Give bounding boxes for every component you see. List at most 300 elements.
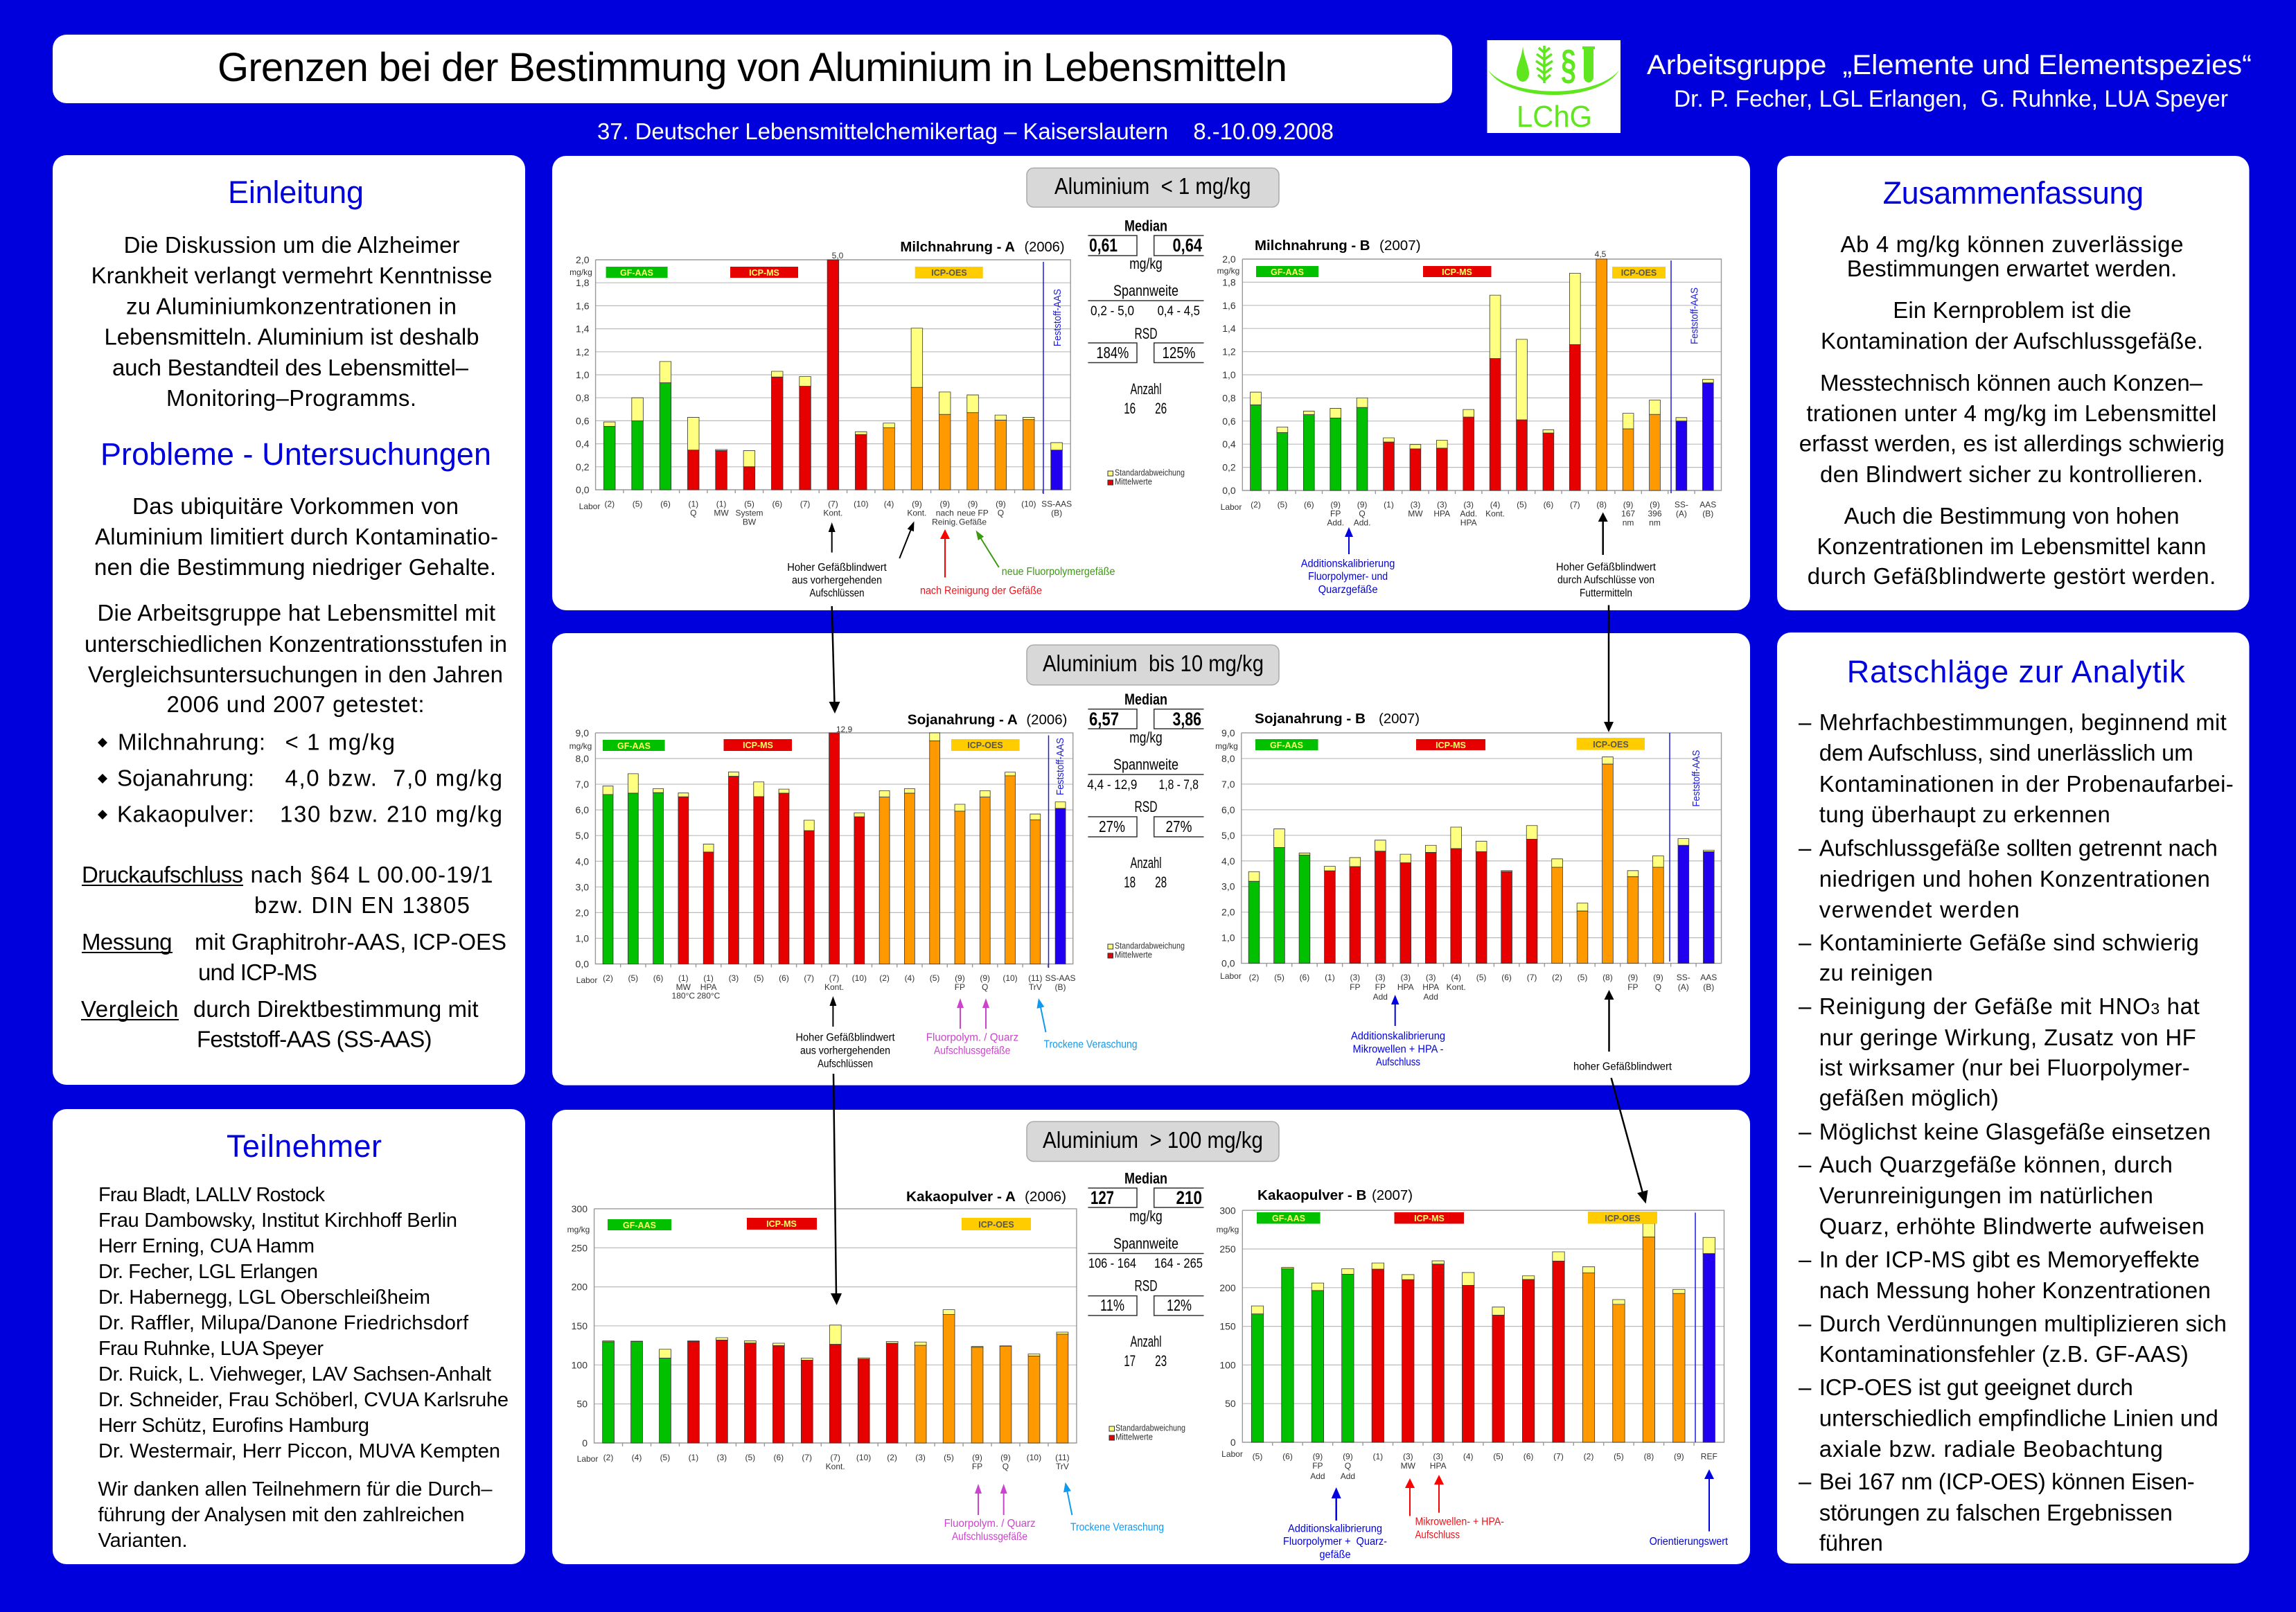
x axis labels: FP bbox=[955, 982, 965, 992]
list: participants: Dr. Ruick, L. Viehweger, LAV Sachsen-Anhalt bbox=[98, 1363, 491, 1385]
statistics: Kakaopulver: 164 - 265 bbox=[1154, 1257, 1203, 1271]
list: advice: zu reinigen bbox=[1819, 960, 1933, 985]
statistics: Kakaopulver: 11% bbox=[1100, 1296, 1124, 1314]
method tags: ICP-MS bbox=[743, 741, 773, 750]
y axis labels: 6,0 bbox=[576, 804, 589, 815]
text block: comparison studies: unterschiedlichen Konzentrationsstufen in bbox=[85, 631, 507, 657]
arrow: Sojanahrung to Kakaopulver A bbox=[831, 1074, 842, 1305]
x axis labels: (7) bbox=[1527, 973, 1537, 982]
x axis labels: (5) bbox=[660, 1453, 670, 1462]
x axis labels: (7) bbox=[804, 973, 814, 983]
callout: Additionskalibrierung bbox=[1301, 558, 1395, 596]
chart title: Milchnahrung - B bbox=[1255, 238, 1370, 254]
y axis labels: 150 bbox=[1219, 1321, 1236, 1332]
method tags bbox=[1256, 266, 1666, 278]
chart title: Kakaopulver - A bbox=[906, 1189, 1016, 1205]
x axis labels: (2) bbox=[879, 973, 890, 983]
y axis labels bbox=[1217, 1205, 1239, 1448]
chart title: (2007) bbox=[1379, 238, 1421, 254]
logo: LChG: LChG bbox=[1517, 100, 1592, 134]
callout: Additionskalibrierung Mikrowellen: Mikrowellen + HPA - bbox=[1352, 1043, 1444, 1055]
y axis labels bbox=[567, 1203, 590, 1449]
value label: 4,5 bbox=[1595, 249, 1607, 259]
x axis labels: (5) bbox=[1278, 500, 1287, 510]
y axis labels: 7,0 bbox=[1221, 779, 1235, 790]
list: advice: axiale bzw. radiale Beobachtung bbox=[1819, 1436, 2163, 1462]
x axis labels: (1) bbox=[1384, 500, 1394, 510]
x axis labels: HPA bbox=[1397, 982, 1414, 992]
method tags bbox=[1255, 738, 1645, 750]
statistics: Kakaopulver: 17 bbox=[1124, 1352, 1136, 1370]
x axis labels: (1) bbox=[678, 973, 689, 983]
x axis labels: nach bbox=[936, 508, 954, 518]
solid sampling divider: Feststoff-AAS bbox=[1690, 750, 1702, 807]
statistics: Sojanahrung: RSD bbox=[1135, 798, 1157, 815]
x axis labels: (9) bbox=[1313, 1452, 1323, 1462]
method tags bbox=[606, 267, 983, 278]
method tags: GF-AAS bbox=[623, 1221, 656, 1230]
x axis labels: (5) bbox=[754, 973, 764, 983]
chart: Sojanahrung A bbox=[569, 712, 1138, 1070]
x axis labels: (6) bbox=[1304, 500, 1314, 510]
list: advice: niedrigen und hohen Konzentrationen bbox=[1819, 866, 2210, 892]
list: advice: Verunreinigungen im natürlichen bbox=[1819, 1183, 2153, 1208]
x axis labels: Gefäße bbox=[959, 517, 987, 527]
callout: Additionskalibrierung Fluorpolymer: gefäße bbox=[1319, 1549, 1351, 1561]
y axis labels: 1,8 bbox=[576, 277, 590, 288]
x axis labels: (6) bbox=[1282, 1452, 1293, 1462]
text block: summary: Auch die Bestimmung von hohen bbox=[1844, 503, 2180, 529]
x axis labels: System bbox=[735, 508, 763, 518]
arrow: magenta Q bbox=[1000, 1484, 1007, 1515]
arrow: blue reference bbox=[1704, 1469, 1714, 1532]
arrow: cyan bbox=[1036, 998, 1046, 1032]
x axis labels: (6) bbox=[779, 973, 789, 983]
text block: methods: Messung bbox=[82, 929, 172, 955]
list: advice: Kontaminationsfehler (z.B. GF-AAS) bbox=[1819, 1341, 2189, 1367]
plot bars bbox=[595, 733, 1073, 968]
x axis labels: (6) bbox=[773, 1453, 784, 1462]
x axis labels: (9) bbox=[1674, 1452, 1684, 1462]
x axis labels: (3) bbox=[1350, 973, 1360, 982]
heading: Teilnehmer: Teilnehmer bbox=[227, 1128, 382, 1164]
x axis labels: (7) bbox=[830, 1453, 840, 1462]
x axis labels: 180°C bbox=[672, 991, 695, 1001]
method tags: ICP-OES bbox=[978, 1220, 1014, 1230]
panel heading pill: Aluminium bis 10 mg/kg bbox=[1043, 650, 1264, 676]
callout: high vessel blank: aus vorhergehenden bbox=[800, 1045, 890, 1057]
statistics: Milchnahrung: 0,61 bbox=[1089, 235, 1118, 256]
list: sample concentrations bbox=[98, 729, 502, 827]
legend: Standardabweichung bbox=[1115, 1423, 1185, 1433]
list: advice: nach Messung hoher Konzentrationen bbox=[1819, 1277, 2211, 1303]
x axis labels: (10) bbox=[852, 973, 867, 983]
x axis labels: Kont. bbox=[824, 982, 844, 992]
text block: ubiquitous occurrence: Aluminium limitiert durch Kontaminatio- bbox=[95, 524, 498, 549]
list: participants: Frau Bladt, LALLV Rostock bbox=[98, 1184, 326, 1206]
list: participants: Dr. Westermair, Herr Piccon, MUVA Kempten bbox=[98, 1440, 500, 1462]
chart title bbox=[1255, 238, 1421, 254]
y axis labels: 0,6 bbox=[576, 415, 590, 426]
x axis labels: (8) bbox=[1596, 500, 1607, 510]
x axis labels: 396 bbox=[1648, 509, 1662, 519]
x axis labels: (9) bbox=[1330, 500, 1341, 510]
text block: methods bbox=[81, 862, 506, 1052]
x axis labels: HPA bbox=[1422, 982, 1439, 992]
callout: Fluorpolym / Quarz: Fluorpolym. / Quarz bbox=[944, 1518, 1036, 1530]
method tags bbox=[608, 1218, 1031, 1230]
y axis labels: 200 bbox=[572, 1282, 588, 1293]
method tags: ICP-MS bbox=[1436, 741, 1466, 750]
x axis labels: SS-AAS bbox=[1045, 973, 1076, 983]
list: advice: Bei 167 nm (ICP-OES) können Eisen- bbox=[1819, 1469, 2195, 1494]
list: advice: störungen zu falschen Ergebnissen bbox=[1819, 1500, 2173, 1525]
x axis labels: MW bbox=[714, 508, 729, 518]
x axis labels: Add bbox=[1310, 1471, 1325, 1481]
text block: summary: Konzentrationen im Lebensmittel kann bbox=[1817, 533, 2206, 559]
x axis labels: (7) bbox=[800, 499, 810, 509]
y axis labels: 250 bbox=[572, 1242, 588, 1253]
method tags bbox=[1257, 1212, 1657, 1223]
x axis labels: (9) bbox=[1343, 1452, 1353, 1462]
x axis labels: (7) bbox=[829, 973, 839, 983]
x axis labels: SS- bbox=[1675, 500, 1688, 510]
method tags: ICP-MS bbox=[1442, 267, 1472, 277]
x axis labels: (B) bbox=[1054, 982, 1066, 992]
statistics: Sojanahrung bbox=[1087, 691, 1204, 960]
x axis labels: (9) bbox=[968, 499, 978, 509]
chart: Kakaopulver B bbox=[1217, 1188, 1728, 1561]
list: advice: ist wirksamer (nur bei Fluorpolymer- bbox=[1819, 1055, 2190, 1081]
working group header: Dr. P. Fecher, LGL Erlangen, G. Ruhnke, LUA Speyer bbox=[1674, 86, 2228, 112]
y axis labels: 100 bbox=[572, 1359, 588, 1370]
text block: introduction: Monitoring–Programms. bbox=[166, 385, 416, 411]
statistics: Milchnahrung: 0,64 bbox=[1172, 235, 1202, 256]
arrow: magenta FP bbox=[975, 1484, 982, 1515]
y axis labels: 3,0 bbox=[576, 881, 589, 892]
arrow: magenta FP bbox=[957, 998, 964, 1029]
x axis labels: (10) bbox=[854, 499, 868, 509]
plot bars bbox=[596, 260, 1070, 493]
list: participants: Herr Erning, CUA Hamm bbox=[98, 1235, 315, 1257]
x axis labels: Labor bbox=[576, 975, 597, 985]
panel: Ratschläge zur Analytik bbox=[1777, 632, 2249, 1564]
list: advice: gefäßen möglich) bbox=[1819, 1085, 1999, 1110]
x axis labels: (10) bbox=[856, 1453, 871, 1462]
x axis labels: Labor bbox=[1221, 1449, 1243, 1459]
list: sample concentrations: Kakaopulver: bbox=[117, 801, 254, 827]
statistics: Sojanahrung: 27% bbox=[1099, 817, 1125, 835]
x axis labels: nm bbox=[1623, 518, 1634, 528]
y axis labels: 0,0 bbox=[1222, 485, 1236, 496]
title banner: Grenzen bei der Bestimmung von Aluminium in Lebensmitteln bbox=[218, 45, 1287, 90]
text block: introduction: Lebensmitteln. Aluminium ist deshalb bbox=[104, 324, 479, 349]
chart title: Sojanahrung - B bbox=[1255, 711, 1366, 727]
x axis labels bbox=[577, 1453, 1070, 1471]
y axis labels: 1,4 bbox=[1222, 323, 1236, 334]
reference divider bbox=[1695, 1212, 1696, 1442]
x axis labels: Labor bbox=[1220, 971, 1242, 981]
statistics: Milchnahrung: Anzahl bbox=[1131, 380, 1161, 398]
chart title: (2006) bbox=[1025, 1189, 1066, 1205]
y axis labels: mg/kg bbox=[569, 741, 592, 751]
x axis labels: (5) bbox=[1476, 973, 1486, 982]
x axis labels: (3) bbox=[1433, 1452, 1443, 1462]
x axis labels: Q bbox=[1655, 982, 1661, 992]
value label: 12,9 bbox=[836, 725, 853, 734]
x axis labels: (4) bbox=[1490, 500, 1500, 510]
x axis labels: (7) bbox=[828, 499, 838, 509]
x axis labels: (3) bbox=[1375, 973, 1386, 982]
callout: Fluorpolym / Quarz bbox=[944, 1518, 1036, 1543]
text block: methods: Vergleich bbox=[81, 996, 179, 1022]
x axis labels: AAS bbox=[1700, 973, 1717, 982]
chart: Sojanahrung B bbox=[1215, 711, 1722, 1073]
chart title: Kakaopulver - B bbox=[1257, 1188, 1366, 1203]
x axis labels: (9) bbox=[980, 973, 990, 983]
value label: 5,0 bbox=[832, 251, 844, 260]
text block: comparison studies: Die Arbeitsgruppe hat Lebensmittel mit bbox=[97, 600, 495, 626]
statistics: Kakaopulver: 23 bbox=[1155, 1352, 1167, 1370]
callout: Additionskalibrierung Fluorpolymer bbox=[1283, 1523, 1387, 1561]
x axis labels: (5) bbox=[628, 973, 638, 983]
x axis labels: (7) bbox=[1553, 1452, 1564, 1462]
callout: Additionskalibrierung: Fluorpolymer- und bbox=[1308, 571, 1388, 583]
statistics: Milchnahrung: 26 bbox=[1155, 400, 1167, 417]
text block: summary: Ein Kernproblem ist die bbox=[1893, 297, 2131, 323]
statistics: Milchnahrung bbox=[1088, 218, 1204, 487]
x axis labels: Add. bbox=[1354, 518, 1370, 528]
x axis labels: Kont. bbox=[823, 508, 842, 518]
x axis labels: (5) bbox=[1253, 1452, 1262, 1462]
y axis labels: 0,2 bbox=[1222, 462, 1236, 473]
chart title bbox=[900, 240, 1064, 255]
y axis labels: 5,0 bbox=[1221, 830, 1235, 841]
y axis labels: 1,2 bbox=[576, 346, 590, 357]
y axis labels: 1,0 bbox=[576, 369, 590, 380]
x axis labels: AAS bbox=[1699, 500, 1716, 510]
list: participants: Dr. Schneider, Frau Schöberl, CVUA Karlsruhe bbox=[98, 1389, 509, 1411]
text block: ubiquitous occurrence: nen die Bestimmung niedriger Gehalte. bbox=[94, 554, 496, 580]
x axis labels bbox=[576, 973, 1076, 1001]
y axis labels: 2,0 bbox=[1221, 907, 1235, 918]
y axis labels: 150 bbox=[572, 1320, 588, 1331]
text block: summary: den Blindwert sicher zu kontrollieren. bbox=[1820, 461, 2203, 487]
arrow: cyan bbox=[1063, 1482, 1072, 1515]
callout: feed digestions: Hoher Gefäßblindwert bbox=[1556, 562, 1657, 574]
x axis labels: Q bbox=[1345, 1461, 1351, 1471]
legend bbox=[1108, 468, 1185, 487]
y axis labels: 0,2 bbox=[576, 461, 590, 472]
y axis labels: 1,0 bbox=[1222, 369, 1236, 380]
callout: Mikrowellen HPA: Aufschluss bbox=[1415, 1530, 1460, 1541]
callout: high vessel blank: aus vorhergehenden bbox=[792, 575, 882, 587]
y axis labels: 0,8 bbox=[1222, 392, 1236, 403]
list: advice: nur geringe Wirkung, Zusatz von HF bbox=[1819, 1025, 2196, 1050]
x axis labels: (1) bbox=[688, 499, 698, 509]
chart title bbox=[908, 712, 1067, 727]
x axis labels: (2) bbox=[603, 973, 613, 983]
list: advice: Mehrfachbestimmungen, beginnend mit bbox=[1819, 709, 2227, 735]
x axis labels: (9) bbox=[1650, 500, 1660, 510]
x axis labels: 280°C bbox=[697, 991, 721, 1001]
legend: Standardabweichung bbox=[1115, 468, 1185, 478]
list: advice bbox=[1799, 709, 2234, 1556]
x axis labels: (6) bbox=[653, 973, 663, 983]
list: participants: Frau Ruhnke, LUA Speyer bbox=[98, 1338, 324, 1360]
y axis labels: 8,0 bbox=[1221, 753, 1235, 764]
arrow: Milchnahrung to Sojanahrung B bbox=[1604, 605, 1614, 732]
x axis labels: (A) bbox=[1676, 509, 1687, 519]
callout: Mikrowellen HPA bbox=[1415, 1516, 1504, 1541]
list: advice: Quarz, erhöhte Blindwerte aufweisen bbox=[1819, 1214, 2205, 1239]
x axis labels: (9) bbox=[912, 499, 922, 509]
text block: thanks bbox=[98, 1478, 493, 1552]
x axis labels: Q bbox=[982, 982, 988, 992]
statistics: Milchnahrung: Median bbox=[1124, 218, 1167, 235]
logo: LChG: § bbox=[1561, 42, 1576, 88]
text block: comparison studies: Vergleichsuntersuchungen in den Jahren bbox=[88, 662, 503, 687]
x axis labels: Q bbox=[690, 508, 696, 518]
x axis labels: (5) bbox=[1578, 973, 1587, 982]
y axis labels: mg/kg bbox=[1215, 741, 1238, 751]
x axis labels: SS-AAS bbox=[1041, 499, 1072, 509]
arrow: Kont. bbox=[829, 996, 836, 1027]
x axis labels: Q bbox=[1359, 509, 1366, 519]
list: advice: ICP-OES ist gut geeignet durch bbox=[1819, 1374, 2133, 1400]
list: advice: – bbox=[1799, 709, 1812, 735]
callout: high vessel blank bbox=[787, 562, 887, 599]
x axis labels: Reinig. bbox=[932, 517, 957, 527]
x axis labels: (6) bbox=[772, 499, 782, 509]
callout: Additionskalibrierung: Additionskalibrierung bbox=[1301, 558, 1395, 569]
statistics: Sojanahrung: Spannweite bbox=[1113, 756, 1178, 773]
list: sample concentrations: Milchnahrung: bbox=[118, 729, 265, 755]
list: advice: – bbox=[1799, 1119, 1812, 1144]
x axis labels: MW bbox=[1401, 1461, 1416, 1471]
statistics: Kakaopulver: Spannweite bbox=[1113, 1234, 1178, 1252]
callout: Additionskalibrierung Fluorpolymer: Fluorpolymer + Quarz- bbox=[1283, 1536, 1387, 1548]
list: advice: – bbox=[1799, 1469, 1812, 1494]
x axis labels: HPA bbox=[700, 982, 716, 992]
list: advice: dem Aufschluss, sind unerlässlich um bbox=[1819, 740, 2193, 765]
x axis labels: (5) bbox=[1517, 500, 1527, 510]
x axis labels: TrV bbox=[1056, 1462, 1069, 1471]
legend: Mittelwerte bbox=[1115, 950, 1152, 960]
x axis labels bbox=[579, 499, 1072, 527]
title banner bbox=[53, 35, 1452, 103]
x axis labels: HPA bbox=[1460, 518, 1477, 528]
callout: Additionskalibrierung: Quarzgefäße bbox=[1318, 584, 1378, 596]
panel heading pill: Aluminium > 100 mg/kg bbox=[1043, 1127, 1263, 1153]
x axis labels: (6) bbox=[1501, 973, 1512, 982]
callout: high vessel blank: Aufschlüssen bbox=[809, 587, 865, 599]
x axis labels: (6) bbox=[1300, 973, 1309, 982]
method tags bbox=[603, 739, 1020, 751]
statistics: Sojanahrung: Median bbox=[1124, 691, 1167, 708]
list: sample concentrations: 4,0 bzw. 7,0 mg/kg bbox=[285, 765, 502, 791]
text block: methods: Feststoff-AAS (SS-AAS) bbox=[197, 1027, 432, 1052]
x axis labels: Add. bbox=[1460, 509, 1477, 519]
statistics: Kakaopulver bbox=[1088, 1169, 1204, 1442]
plot bars bbox=[594, 1209, 1077, 1446]
text block: methods: durch Direktbestimmung mit bbox=[193, 996, 478, 1022]
x axis labels: Add. bbox=[1327, 518, 1344, 528]
x axis labels: (3) bbox=[1426, 973, 1436, 982]
statistics: Milchnahrung: 125% bbox=[1163, 344, 1196, 362]
x axis labels: FP bbox=[972, 1462, 982, 1471]
text block: methods: und ICP-MS bbox=[198, 959, 317, 985]
y axis labels: 1,6 bbox=[1222, 300, 1236, 311]
x axis labels: HPA bbox=[1433, 509, 1450, 519]
y axis labels: mg/kg bbox=[569, 267, 592, 277]
y axis labels: 3,0 bbox=[1221, 881, 1235, 892]
arrow: Milchnahrung to Sojanahrung A bbox=[829, 606, 840, 714]
x axis labels: Labor bbox=[1221, 502, 1242, 512]
x axis labels: 167 bbox=[1621, 509, 1635, 519]
list: advice: – bbox=[1799, 1247, 1812, 1273]
list: advice: In der ICP-MS gibt es Memoryeffekte bbox=[1819, 1247, 2200, 1273]
y axis labels: 1,0 bbox=[1221, 932, 1235, 944]
text block: summary: Kontamination der Aufschlussgefäße. bbox=[1821, 328, 2203, 354]
callout: Fluorpolym / Quarz: Fluorpolym. / Quarz bbox=[926, 1032, 1018, 1044]
y axis labels: 50 bbox=[576, 1399, 588, 1410]
y axis labels: 0 bbox=[1230, 1437, 1236, 1448]
text block: summary: Bestimmungen erwartet werden. bbox=[1847, 256, 2177, 281]
list: participants: Herr Schütz, Eurofins Hamburg bbox=[98, 1415, 369, 1437]
statistics: Milchnahrung: 16 bbox=[1124, 400, 1136, 417]
x axis labels: (4) bbox=[1463, 1452, 1474, 1462]
y axis labels: 1,8 bbox=[1222, 276, 1236, 287]
y axis labels: 9,0 bbox=[1221, 727, 1235, 738]
callout: Mikrowellen HPA: Mikrowellen- + HPA- bbox=[1415, 1516, 1504, 1528]
y axis labels bbox=[569, 254, 592, 495]
y axis labels: 0,0 bbox=[576, 484, 590, 495]
x axis labels: FP bbox=[1375, 982, 1386, 992]
x axis labels: Labor bbox=[579, 502, 600, 511]
y axis labels: 300 bbox=[572, 1203, 588, 1214]
callout: Orientierungswert: Orientierungswert bbox=[1650, 1536, 1728, 1548]
x axis labels: SS- bbox=[1677, 973, 1690, 982]
arrow: red MW bbox=[1405, 1478, 1415, 1516]
y axis labels: 200 bbox=[1219, 1282, 1236, 1293]
list: advice: tung überhaupt zu erkennen bbox=[1819, 801, 2110, 827]
x axis labels: (8) bbox=[1602, 973, 1613, 982]
x axis labels: TrV bbox=[1029, 982, 1042, 992]
x axis labels: REF bbox=[1701, 1452, 1717, 1462]
x axis labels: (3) bbox=[915, 1453, 926, 1462]
method tags: ICP-MS bbox=[766, 1219, 797, 1229]
x axis labels: (11) bbox=[1055, 1453, 1070, 1462]
heading: Probleme - Untersuchungen: Probleme - Untersuchungen bbox=[100, 436, 491, 472]
text block: methods: Druckaufschluss bbox=[82, 862, 243, 887]
list: sample concentrations: Sojanahrung: bbox=[117, 765, 254, 791]
arrow: blue addition bbox=[1332, 1487, 1341, 1521]
x axis labels: Kont. bbox=[907, 508, 926, 518]
callout: feed digestions: durch Aufschlüsse von bbox=[1557, 574, 1654, 586]
x axis labels: (3) bbox=[1463, 500, 1474, 510]
callout: Additionskalibrierung Mikrowellen: Aufschluss bbox=[1376, 1056, 1420, 1068]
statistics: Sojanahrung: 6,57 bbox=[1089, 709, 1119, 729]
callout: nach Reinigung: nach Reinigung der Gefäße bbox=[920, 585, 1042, 597]
text block: comparison studies: 2006 und 2007 getestet: bbox=[166, 691, 424, 717]
statistics: Sojanahrung: 28 bbox=[1155, 874, 1167, 891]
text block: summary: Messtechnisch können auch Konzen– bbox=[1820, 370, 2203, 396]
heading: Zusammenfassung: Zusammenfassung bbox=[1883, 175, 2144, 211]
statistics: Kakaopulver: 210 bbox=[1176, 1187, 1202, 1208]
method tags: ICP-OES bbox=[1593, 740, 1629, 750]
text block: thanks: Varianten. bbox=[98, 1530, 187, 1552]
